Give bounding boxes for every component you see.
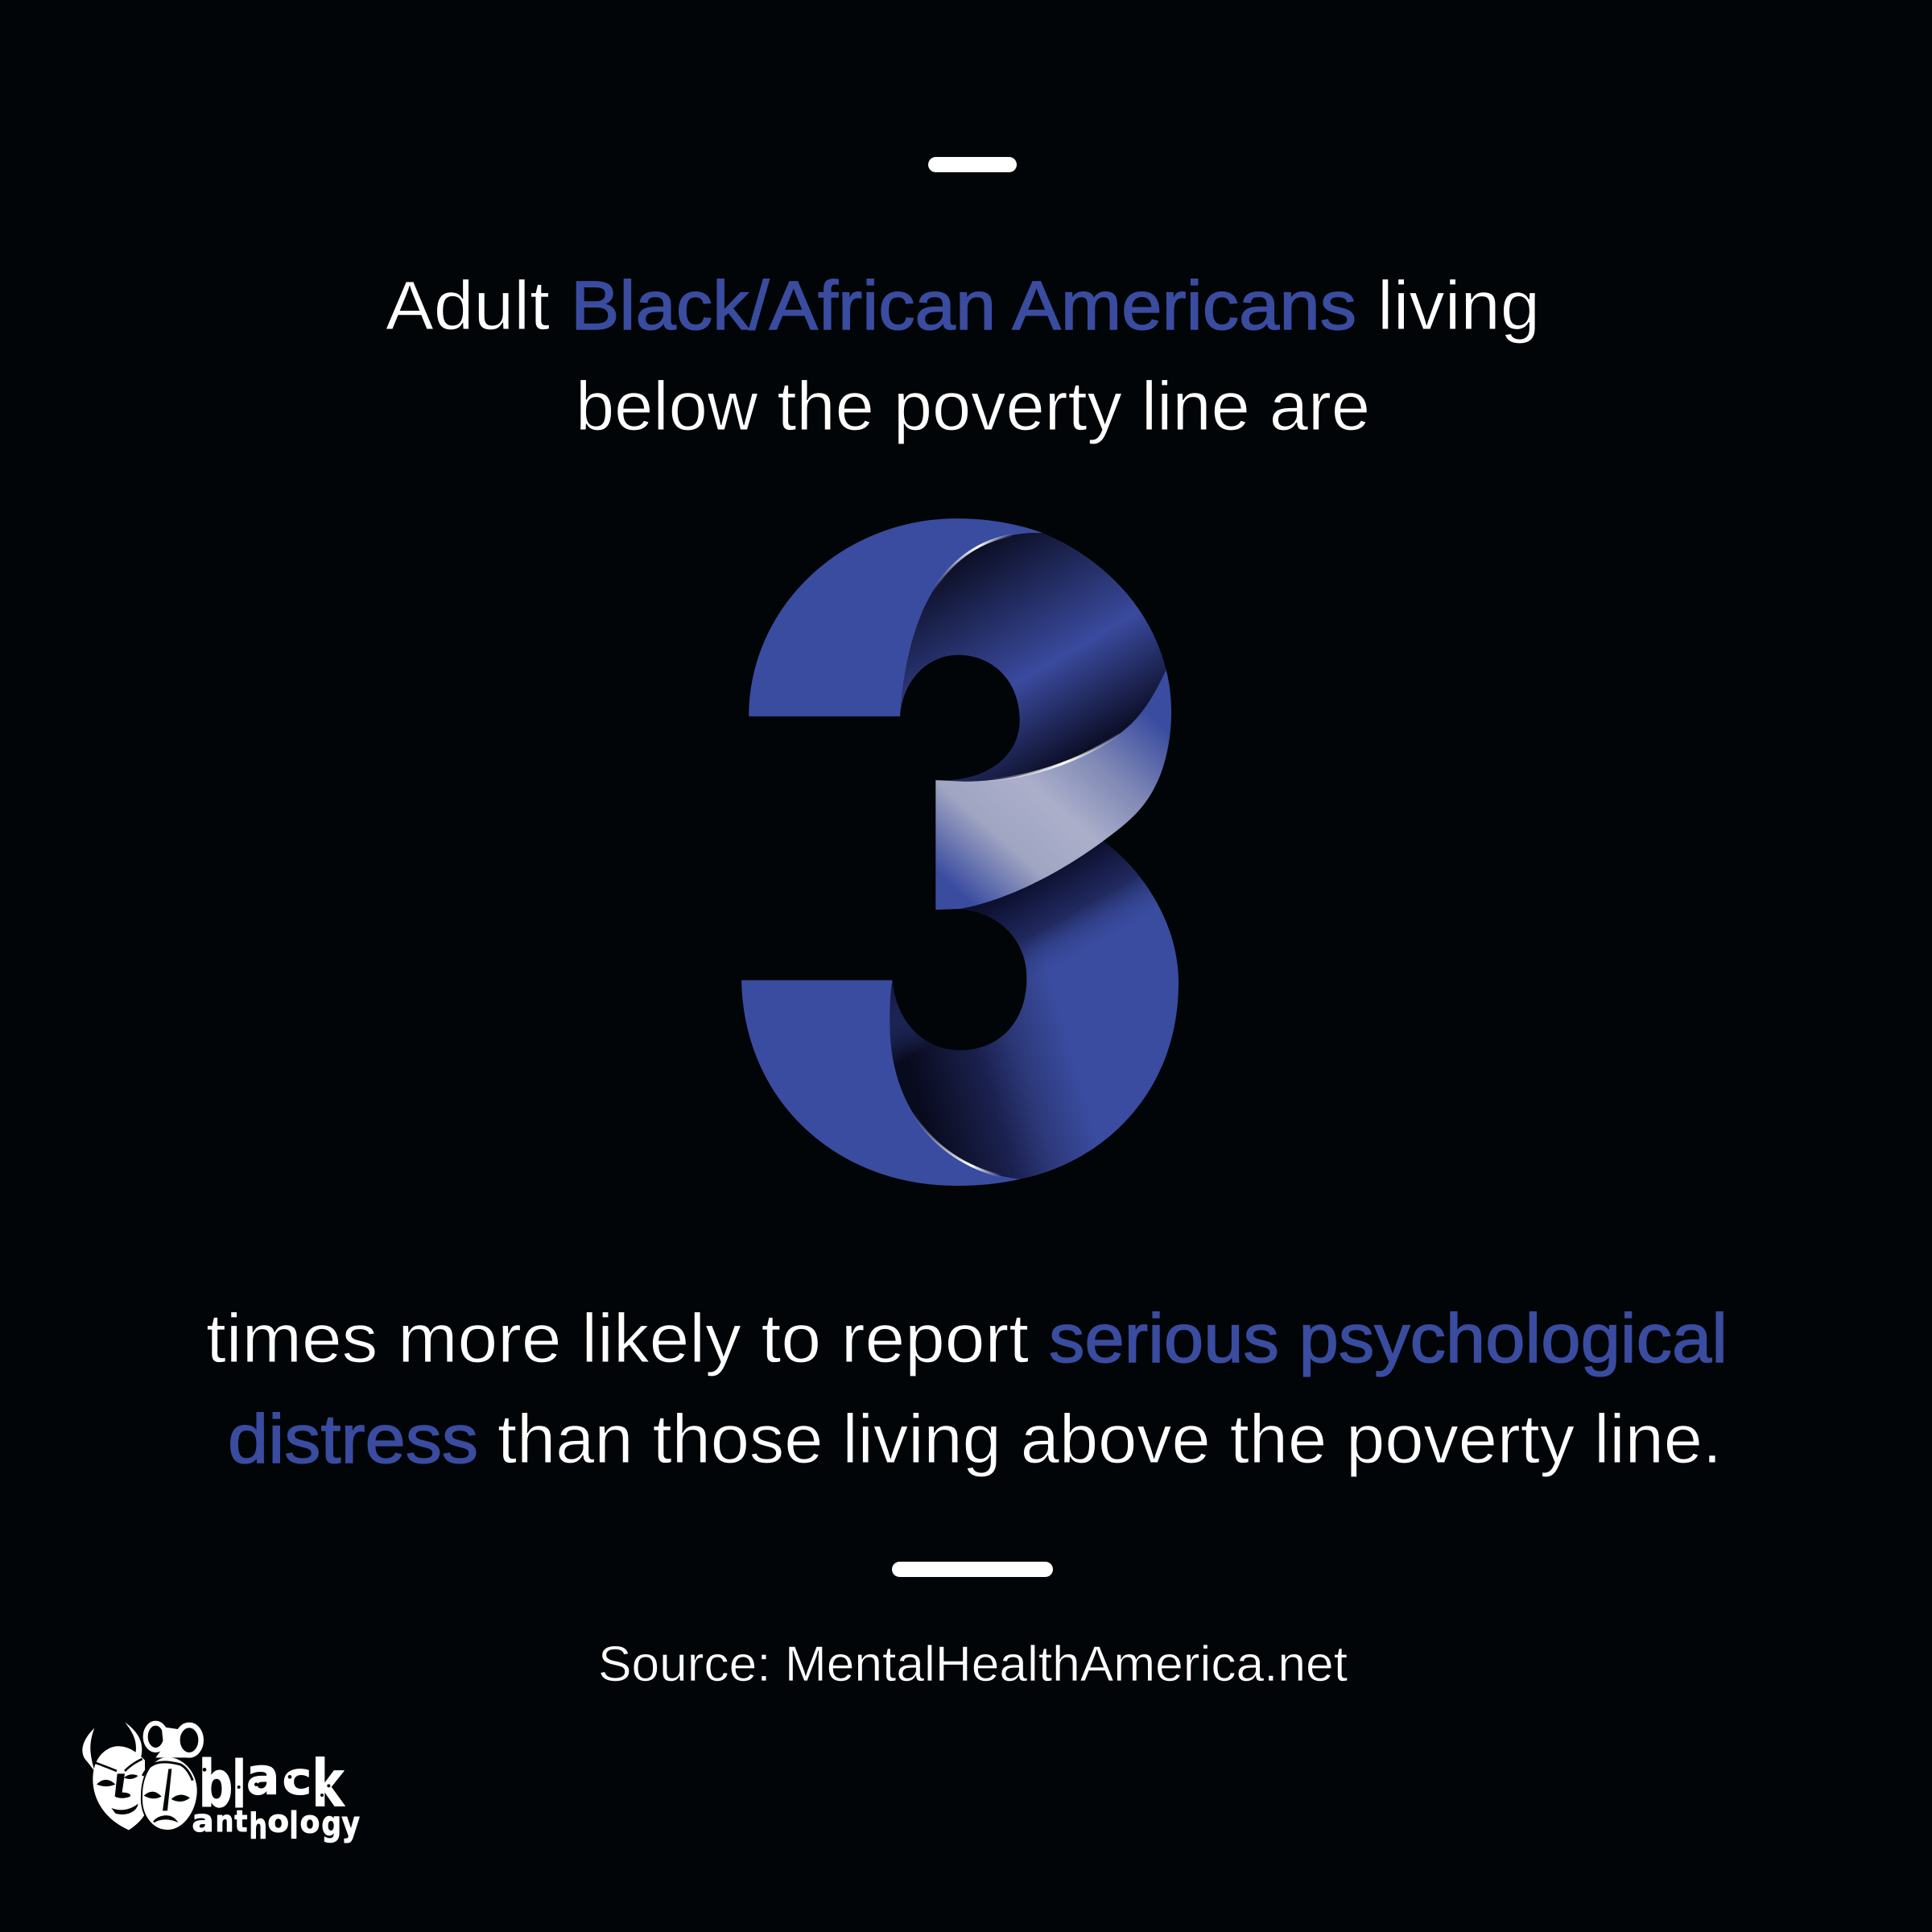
logo wordmark [192,1746,360,1847]
big number 3 [741,518,1179,1186]
light middle band [935,670,1171,910]
logo wordmark: o [300,1805,320,1841]
result text: distress [228,1401,478,1478]
intro text: living [1377,267,1540,345]
intro text [386,267,1540,445]
logo wordmark: l [232,1748,246,1823]
logo wordmark: b [199,1747,233,1822]
intro text: Black/African Americans [571,267,1356,345]
logo wordmark: a [192,1803,214,1839]
logo wordmark: k [312,1746,345,1821]
highlights on fold edges [890,533,1119,1179]
bottom-left flat face [741,980,1021,1186]
logo wordmark: o [267,1804,289,1840]
logo: black anthology [82,1722,360,1847]
logo wordmark: g [321,1804,341,1843]
top divider bar [928,157,1017,172]
logo wordmark: h [249,1806,267,1847]
lower lobe [890,841,1179,1179]
top-left flat face [749,518,1042,716]
logo wordmark: l [289,1804,299,1847]
intro text: below the poverty line are [576,368,1370,445]
logo wordmark: n [216,1804,233,1839]
intro text: Adult [386,267,550,345]
logo wordmark: y [341,1804,360,1843]
result text: times more likely to report [206,1300,1029,1377]
logo wordmark: t [234,1804,247,1839]
lower divider bar [892,1562,1053,1577]
result text [206,1300,1728,1478]
top dark fold [900,533,1166,782]
source line: Source: MentalHealthAmerica.net [598,1637,1348,1692]
result text: serious psychological [1049,1300,1728,1377]
logo wordmark: c [283,1752,312,1804]
icon: theatre masks [82,1722,201,1831]
logo wordmark: a [246,1746,279,1806]
result text: than those living above the poverty line. [497,1401,1722,1478]
